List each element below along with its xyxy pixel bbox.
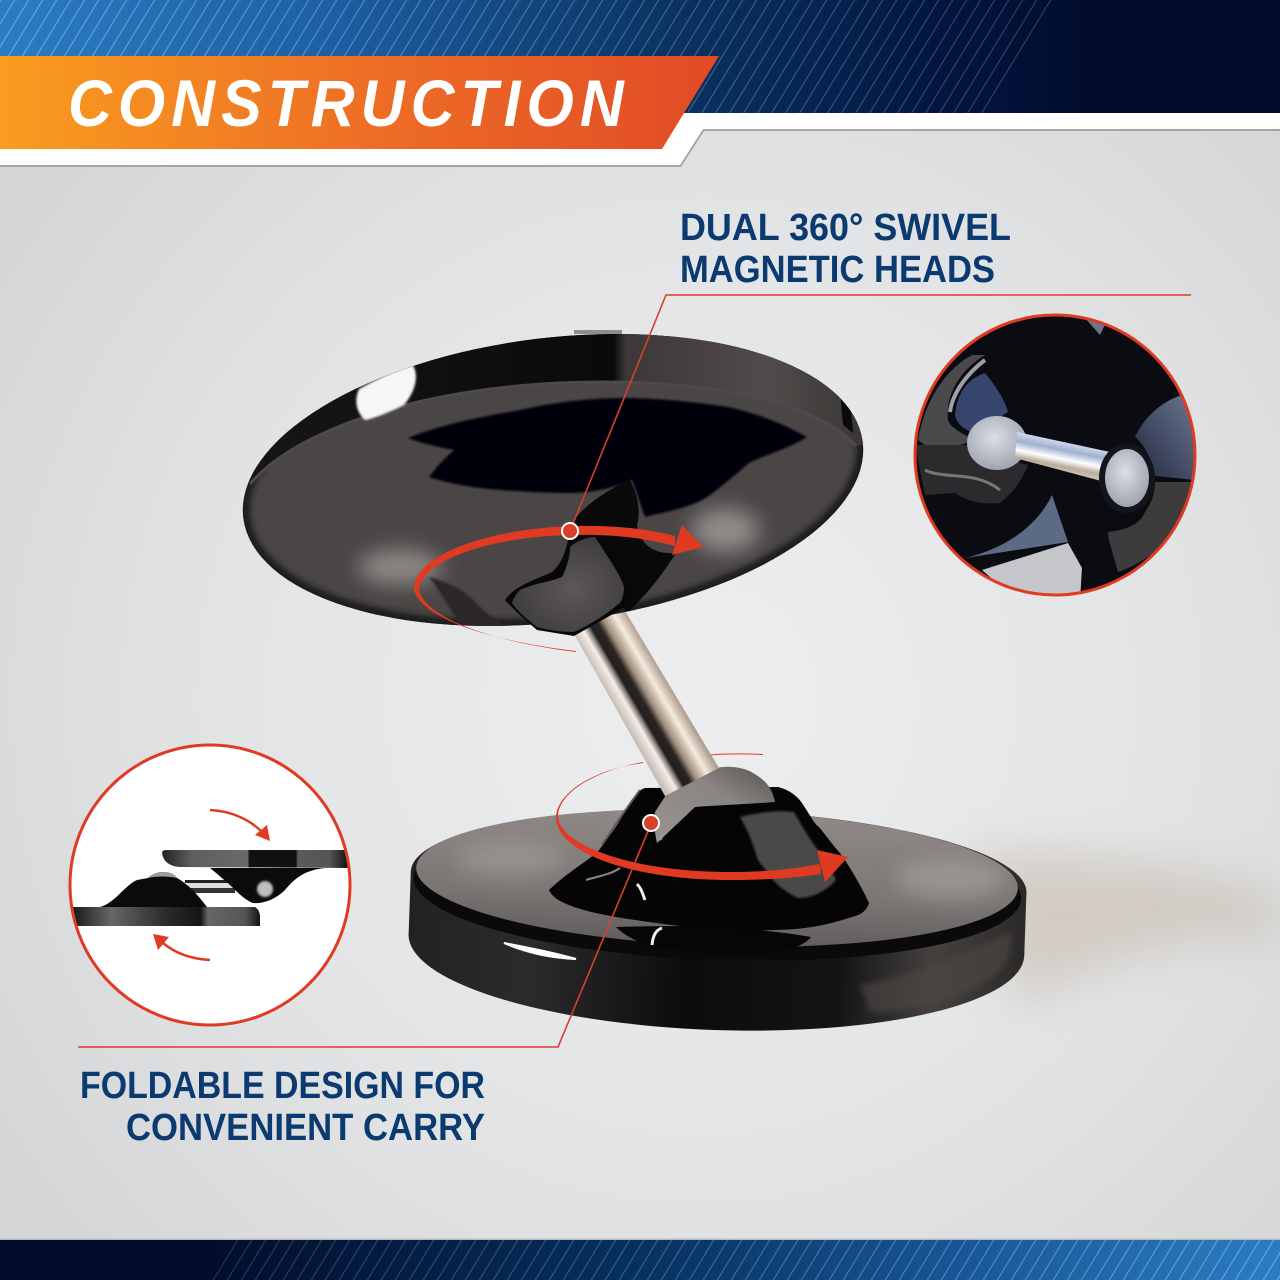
leader line: foldable — [78, 815, 659, 1047]
disc side notch — [840, 398, 853, 433]
disc rim highlight — [356, 364, 416, 420]
top banner bar — [0, 0, 1280, 113]
product: foldable dumbbell — [220, 301, 1029, 1041]
callout heading: swivel heads — [680, 207, 1011, 291]
heading banner: construction — [0, 56, 719, 149]
folded upper head — [162, 850, 350, 903]
upper disc — [242, 330, 864, 636]
right lobe reflections — [1135, 395, 1196, 480]
lower hub — [549, 767, 869, 955]
bottom banner bar — [0, 1238, 1280, 1280]
inset: swivel close-up — [915, 315, 1196, 600]
folded shaft — [185, 880, 235, 893]
top rotation arrow — [414, 525, 703, 652]
folded lower head — [70, 872, 260, 926]
leader line: swivel heads — [562, 295, 1191, 539]
fold arrow bottom — [153, 934, 210, 960]
disc rim band — [248, 334, 863, 484]
callout heading: foldable design: FOLDABLE DESIGN FOR — [80, 1065, 485, 1107]
background wedges — [965, 495, 1068, 558]
heading text: CONSTRUCTION — [68, 68, 625, 141]
ball joints — [967, 416, 1027, 470]
callout heading: foldable design — [80, 1065, 485, 1149]
callout heading: swivel heads: DUAL 360° SWIVEL — [680, 207, 1011, 249]
upper ball joint — [505, 530, 632, 636]
callout heading: swivel heads: MAGNETIC HEADS — [680, 249, 995, 291]
fold arrow top — [210, 810, 270, 841]
central black reflection — [408, 398, 807, 517]
bottom rotation arrow — [556, 754, 848, 882]
floor shadow — [960, 852, 1280, 1005]
funnel flare — [428, 576, 508, 626]
lower base disc — [406, 767, 1029, 1041]
left lobe reflections — [918, 355, 985, 445]
callout heading: foldable design: CONVENIENT CARRY — [126, 1107, 485, 1149]
chrome shaft — [574, 606, 719, 796]
white banner underline — [0, 113, 1280, 167]
lower ball joint — [654, 767, 775, 843]
inset: folded view — [70, 745, 350, 1025]
base highlights — [504, 943, 576, 959]
